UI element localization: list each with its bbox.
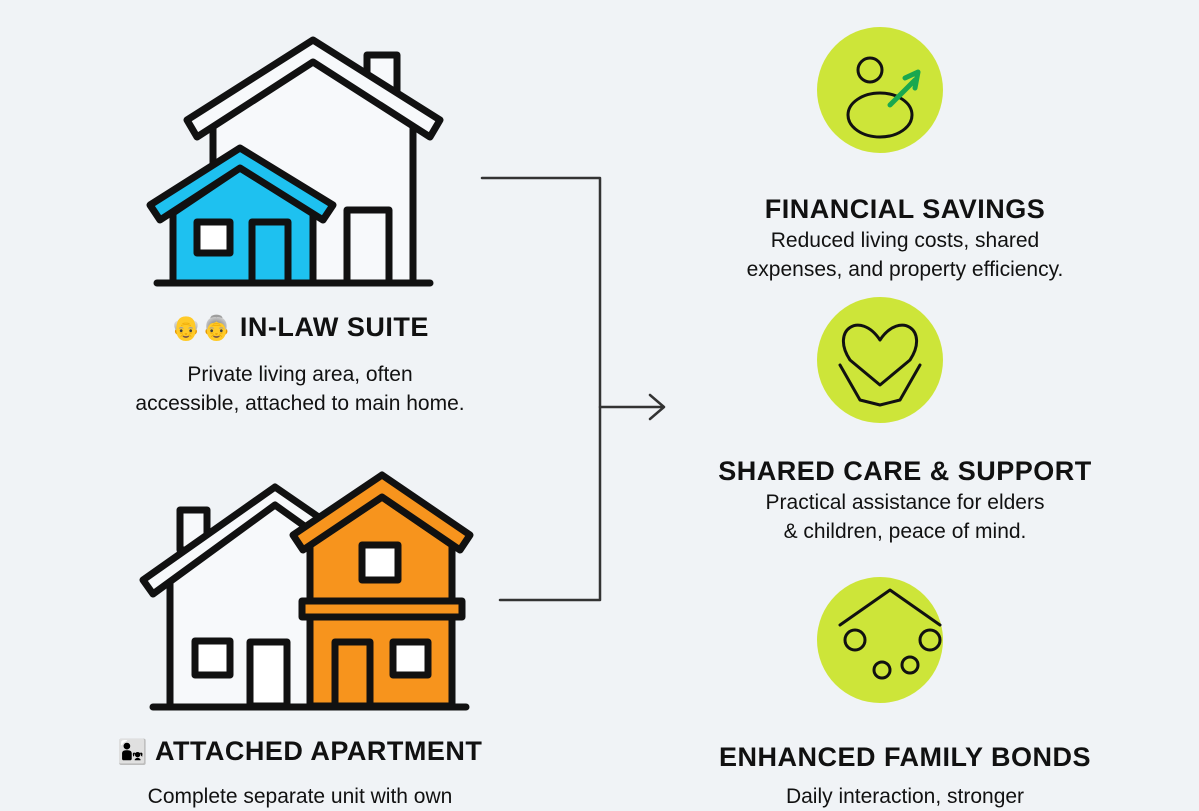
text: in-law suite description xyxy=(135,363,465,415)
text: in-law suite description: Private living area, often xyxy=(187,363,413,386)
text: shared care description: & children, peace of mind. xyxy=(784,520,1026,543)
text: financial description: Reduced living costs, shared xyxy=(771,229,1039,252)
text: financial description xyxy=(747,229,1063,281)
icon: attached apartment house xyxy=(143,475,470,707)
text: in-law suite description: accessible, attached to main home. xyxy=(135,392,465,415)
heading: attached apartment: 👨‍👧 ATTACHED APARTMENT xyxy=(118,736,482,766)
text: financial description: expenses, and property efficiency. xyxy=(747,258,1063,281)
heading: family bonds: ENHANCED FAMILY BONDS xyxy=(719,742,1091,772)
text: shared care description xyxy=(766,491,1044,543)
icon: care hands circle xyxy=(817,297,943,423)
icon: family circle xyxy=(817,577,943,703)
text: shared care description: Practical assistance for elders xyxy=(766,491,1044,514)
text: attached apartment description: Complete separate unit with own xyxy=(148,785,452,808)
heading: financial savings: FINANCIAL SAVINGS xyxy=(765,194,1045,224)
icon: in-law suite house xyxy=(150,40,440,283)
text: family bonds description: Daily interaction, stronger xyxy=(786,785,1024,808)
heading: in-law suite: 👴👵 IN-LAW SUITE xyxy=(171,312,429,342)
heading: shared care: SHARED CARE & SUPPORT xyxy=(718,456,1092,486)
arrow xyxy=(600,395,664,419)
icon: piggy bank circle xyxy=(817,27,943,153)
connector lines xyxy=(482,178,664,600)
